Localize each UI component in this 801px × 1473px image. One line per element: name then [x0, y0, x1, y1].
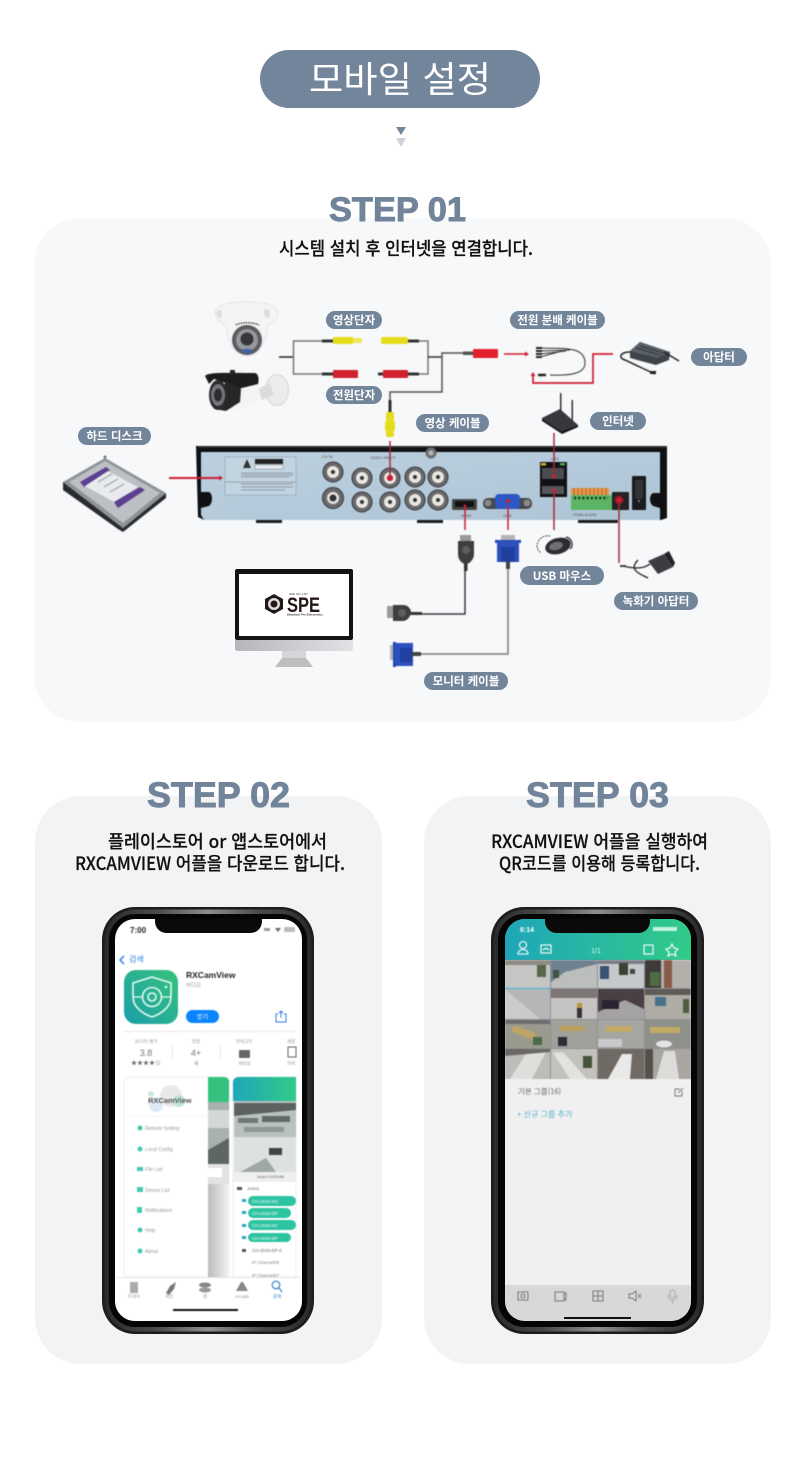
label: USB 마우스: [520, 566, 604, 585]
screenshot card: menu: RXCamView: [148, 1096, 192, 1105]
title pill: [260, 50, 540, 108]
power switch: [632, 476, 646, 510]
diagram: cabling: [279, 337, 613, 437]
app title: RXCamView: [186, 970, 236, 980]
label: 전원 분배 케이블: 전원 분배 케이블: [517, 312, 598, 328]
camera grid: [505, 960, 691, 1079]
screenshot card: menu: Device List: [145, 1188, 170, 1194]
icon: router: [542, 393, 578, 434]
cable: camera split: [279, 341, 463, 412]
back link: 검색: [129, 954, 144, 965]
title pill: 모바일 설정: [309, 51, 491, 103]
notch: [545, 919, 650, 933]
label: 아답터: 아답터: [703, 349, 735, 365]
screenshot card: live list: [233, 1077, 296, 1278]
home indicator: [564, 1317, 631, 1319]
icon: bullet camera: [205, 370, 288, 411]
tab bar: 검색: [273, 1293, 281, 1300]
row 3: [506, 1024, 550, 1048]
icon: power split cable: [536, 348, 585, 375]
feet: [256, 520, 618, 523]
heading: step 03: STEP 03: [526, 775, 669, 815]
button: get: [186, 1010, 219, 1023]
screenshot card: live list: CH-2019-NV: [252, 1223, 278, 1228]
stats row: 비디오: [239, 1060, 251, 1067]
text: step 03 description: QR코드를 이용해 등록합니다.: [499, 850, 700, 876]
label: USB 마우스: USB 마우스: [533, 568, 592, 584]
icon: down arrows: [396, 127, 406, 147]
group list: + 신규 그룹 추가: [517, 1109, 573, 1120]
label: 전원단자: [326, 386, 382, 404]
stats row: 4+: [191, 1048, 201, 1058]
vga port: [483, 494, 532, 509]
label: 전원단자: 전원단자: [333, 387, 376, 403]
stats row: 연령: [192, 1038, 200, 1045]
panel: dvr back: RS485 ALARM: [573, 513, 597, 517]
label: 녹화기 아답터: 녹화기 아답터: [623, 593, 689, 609]
text: step 03 description: [491, 828, 708, 876]
icon: hdmi cable: [387, 535, 474, 621]
screenshot card: live list: CH-2018-DP-0: [252, 1248, 282, 1253]
text: step 01 description: 시스템 설치 후 인터넷을 연결합니다.: [279, 235, 533, 261]
screenshot card: live list: CH-2018-DP: [252, 1211, 278, 1216]
arrows: red lines on the recorder: [169, 433, 622, 563]
text: step 03 description: RXCAMVIEW 어플을 실행하여: [491, 828, 708, 854]
screenshot card: menu: Local Config: [145, 1147, 173, 1153]
icon: recorder adapter: [620, 551, 675, 578]
panel: dvr back: LAN: [551, 456, 559, 461]
logo: SPE: SPE CO.,LTD: [289, 592, 308, 596]
stats row: 카테고리: [236, 1038, 252, 1045]
row 2: [505, 989, 540, 1020]
stats row: 가치: [287, 1060, 295, 1067]
stats row: 세: [194, 1060, 199, 1067]
notch: [155, 919, 262, 933]
connector: video cable: [385, 400, 395, 437]
screenshot card: live list: CH-2019-DP: [252, 1236, 278, 1241]
status and header icons: 1/1: [591, 948, 601, 955]
icon: app shield: [124, 970, 178, 1024]
lan and usb ports: [540, 462, 567, 497]
stats row: ★★★★☆: [131, 1058, 161, 1067]
hdmi port: [452, 499, 477, 510]
stats row: 3.8: [140, 1048, 152, 1058]
icon: dome camera: [215, 302, 278, 356]
row 4: [505, 1049, 550, 1079]
panel: dvr back: [196, 446, 667, 523]
status bar: 7:00: [130, 926, 147, 935]
icon: vga cable: [390, 535, 521, 667]
phone: camera app: [491, 907, 704, 1334]
label: 인터넷: 인터넷: [602, 413, 634, 429]
stats row: 20가지 평가: [135, 1038, 157, 1045]
power jack: [612, 492, 629, 510]
logo: SPE: SPE: [287, 594, 320, 617]
button: get: 받기: [197, 1012, 208, 1021]
screenshot card: menu: Remote Setting: [145, 1126, 180, 1132]
icon: share: [276, 1011, 286, 1022]
warning label: [225, 457, 296, 495]
label: 하드 디스크: [78, 427, 151, 445]
status and header icons: 6:14: [520, 927, 534, 934]
tab bar: [115, 1277, 302, 1321]
panel: dvr back: HDMI: [461, 513, 471, 518]
text: step 02 description: 플레이스토어 or 앱스토어에서: [108, 828, 327, 854]
toolbar: [505, 1285, 691, 1321]
phone: app store: [102, 907, 314, 1334]
bnc connectors: [322, 462, 448, 512]
logo: SPE: [265, 592, 323, 617]
label: 하드 디스크: 하드 디스크: [86, 428, 143, 444]
panel: dvr back: CH IN: [322, 454, 333, 459]
stats row: 개발: [287, 1038, 295, 1045]
group list: 기본 그룹(16): [518, 1086, 561, 1097]
screenshot card: live list: CH-2019-NO: [252, 1199, 279, 1204]
heading: step 01: STEP 01: [329, 191, 466, 229]
back link: [120, 954, 144, 965]
terminal block: [571, 488, 612, 510]
connector: video pair: [322, 337, 419, 344]
app title: 비디오: [186, 981, 201, 989]
screenshot card: menu: Notifications: [145, 1208, 173, 1214]
icon: usb mouse: [537, 535, 573, 557]
screenshot card: live list: Jean-CH20186: [257, 1174, 285, 1179]
screenshot card: menu: [124, 1077, 229, 1277]
arrows: upper red lines: [504, 354, 613, 383]
status bar: [130, 926, 296, 934]
label: 영상 케이블: 영상 케이블: [424, 415, 481, 431]
screenshot card: menu: About: [145, 1249, 159, 1255]
icon: hard disk: [63, 456, 166, 532]
connector: power input: [463, 349, 498, 358]
app title: [186, 970, 236, 989]
panel: step 03: [424, 775, 771, 1364]
screenshot card: menu: File List: [145, 1167, 163, 1173]
arrow heads: upper: [525, 352, 536, 376]
screenshot card: live list: Jeans: [247, 1186, 260, 1191]
stats row: [131, 1038, 296, 1067]
text: step 02 description: RXCAMVIEW 어플을 다운로드 합니다.: [75, 850, 345, 876]
icon: monitor: [235, 569, 353, 667]
status and header icons: [518, 927, 678, 956]
tab bar: 앱: [203, 1293, 207, 1299]
tab bar: 투데이: [128, 1293, 140, 1300]
label: 영상단자: 영상단자: [333, 312, 376, 328]
panel: dvr back: VGA: [503, 513, 512, 518]
label: 모니터 케이블: 모니터 케이블: [433, 673, 500, 689]
logo: SPE: Standard Pro Electronics: [287, 612, 323, 616]
icon: power adapter: [621, 342, 679, 374]
screenshot card: live list: IP Channel06: [252, 1260, 280, 1265]
label: 영상 케이블: [416, 414, 489, 432]
text: step 02 description: [75, 828, 345, 876]
label: 영상단자: [326, 311, 382, 329]
heading: step 02: STEP 02: [147, 775, 290, 815]
row 1: [505, 964, 550, 988]
screenshot card: menu: Help: [145, 1228, 156, 1234]
app header: [505, 919, 691, 960]
panel: dvr back: VIDEO INPUT: [370, 455, 396, 460]
group list: [517, 1086, 683, 1120]
tab bar: Arcade: [235, 1294, 250, 1299]
label: 인터넷: [590, 412, 646, 430]
screenshot card: live list: IP Channel07: [252, 1273, 280, 1278]
tab screw holes: [201, 448, 660, 508]
panel: step 01: [34, 191, 771, 722]
connector: power pair: [322, 370, 419, 378]
tab bar: 게임: [165, 1293, 173, 1300]
panel: step 02: [35, 775, 382, 1364]
label: 아답터: [691, 348, 747, 366]
